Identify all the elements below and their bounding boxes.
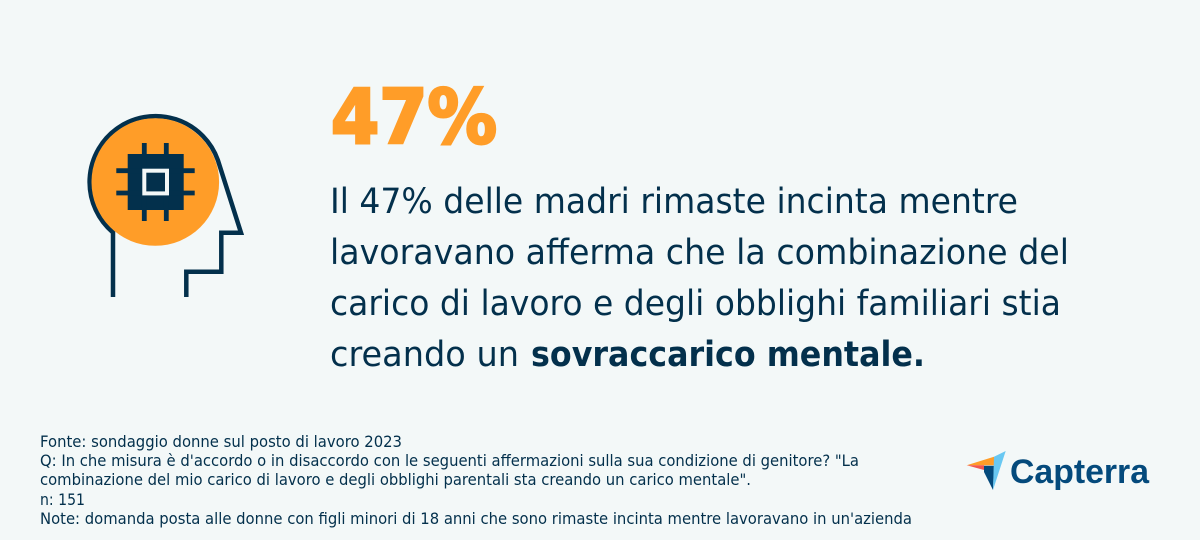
main statement: carico di lavoro e degli obblighi familiari stia (330, 284, 1061, 324)
source notes: combinazione del mio carico di lavoro e degli obblighi parentali sta creando un carico mentale". (40, 470, 751, 489)
main statement: Il 47% delle madri rimaste incinta mentre (330, 182, 1018, 222)
source notes (40, 432, 912, 528)
source notes: Q: In che misura è d'accordo o in disaccordo con le seguenti affermazioni sulla sua condizione di genitore? "La (40, 451, 859, 470)
logo: Capterra: Capterra (1010, 453, 1150, 491)
icon: head with chip (90, 116, 241, 297)
main statement: creando un (330, 335, 519, 375)
source notes: Note: domanda posta alle donne con figli minori di 18 anni che sono rimaste incinta mentre lavoravano in un'azienda (40, 509, 912, 528)
source notes: n: 151 (40, 490, 85, 509)
main statement (330, 182, 1069, 375)
source notes: Fonte: sondaggio donne sul posto di lavoro 2023 (40, 432, 402, 451)
main statement: lavoravano afferma che la combinazione del (330, 233, 1069, 273)
main statement: sovraccarico mentale. (531, 335, 925, 375)
big percentage: 47% (331, 73, 497, 161)
